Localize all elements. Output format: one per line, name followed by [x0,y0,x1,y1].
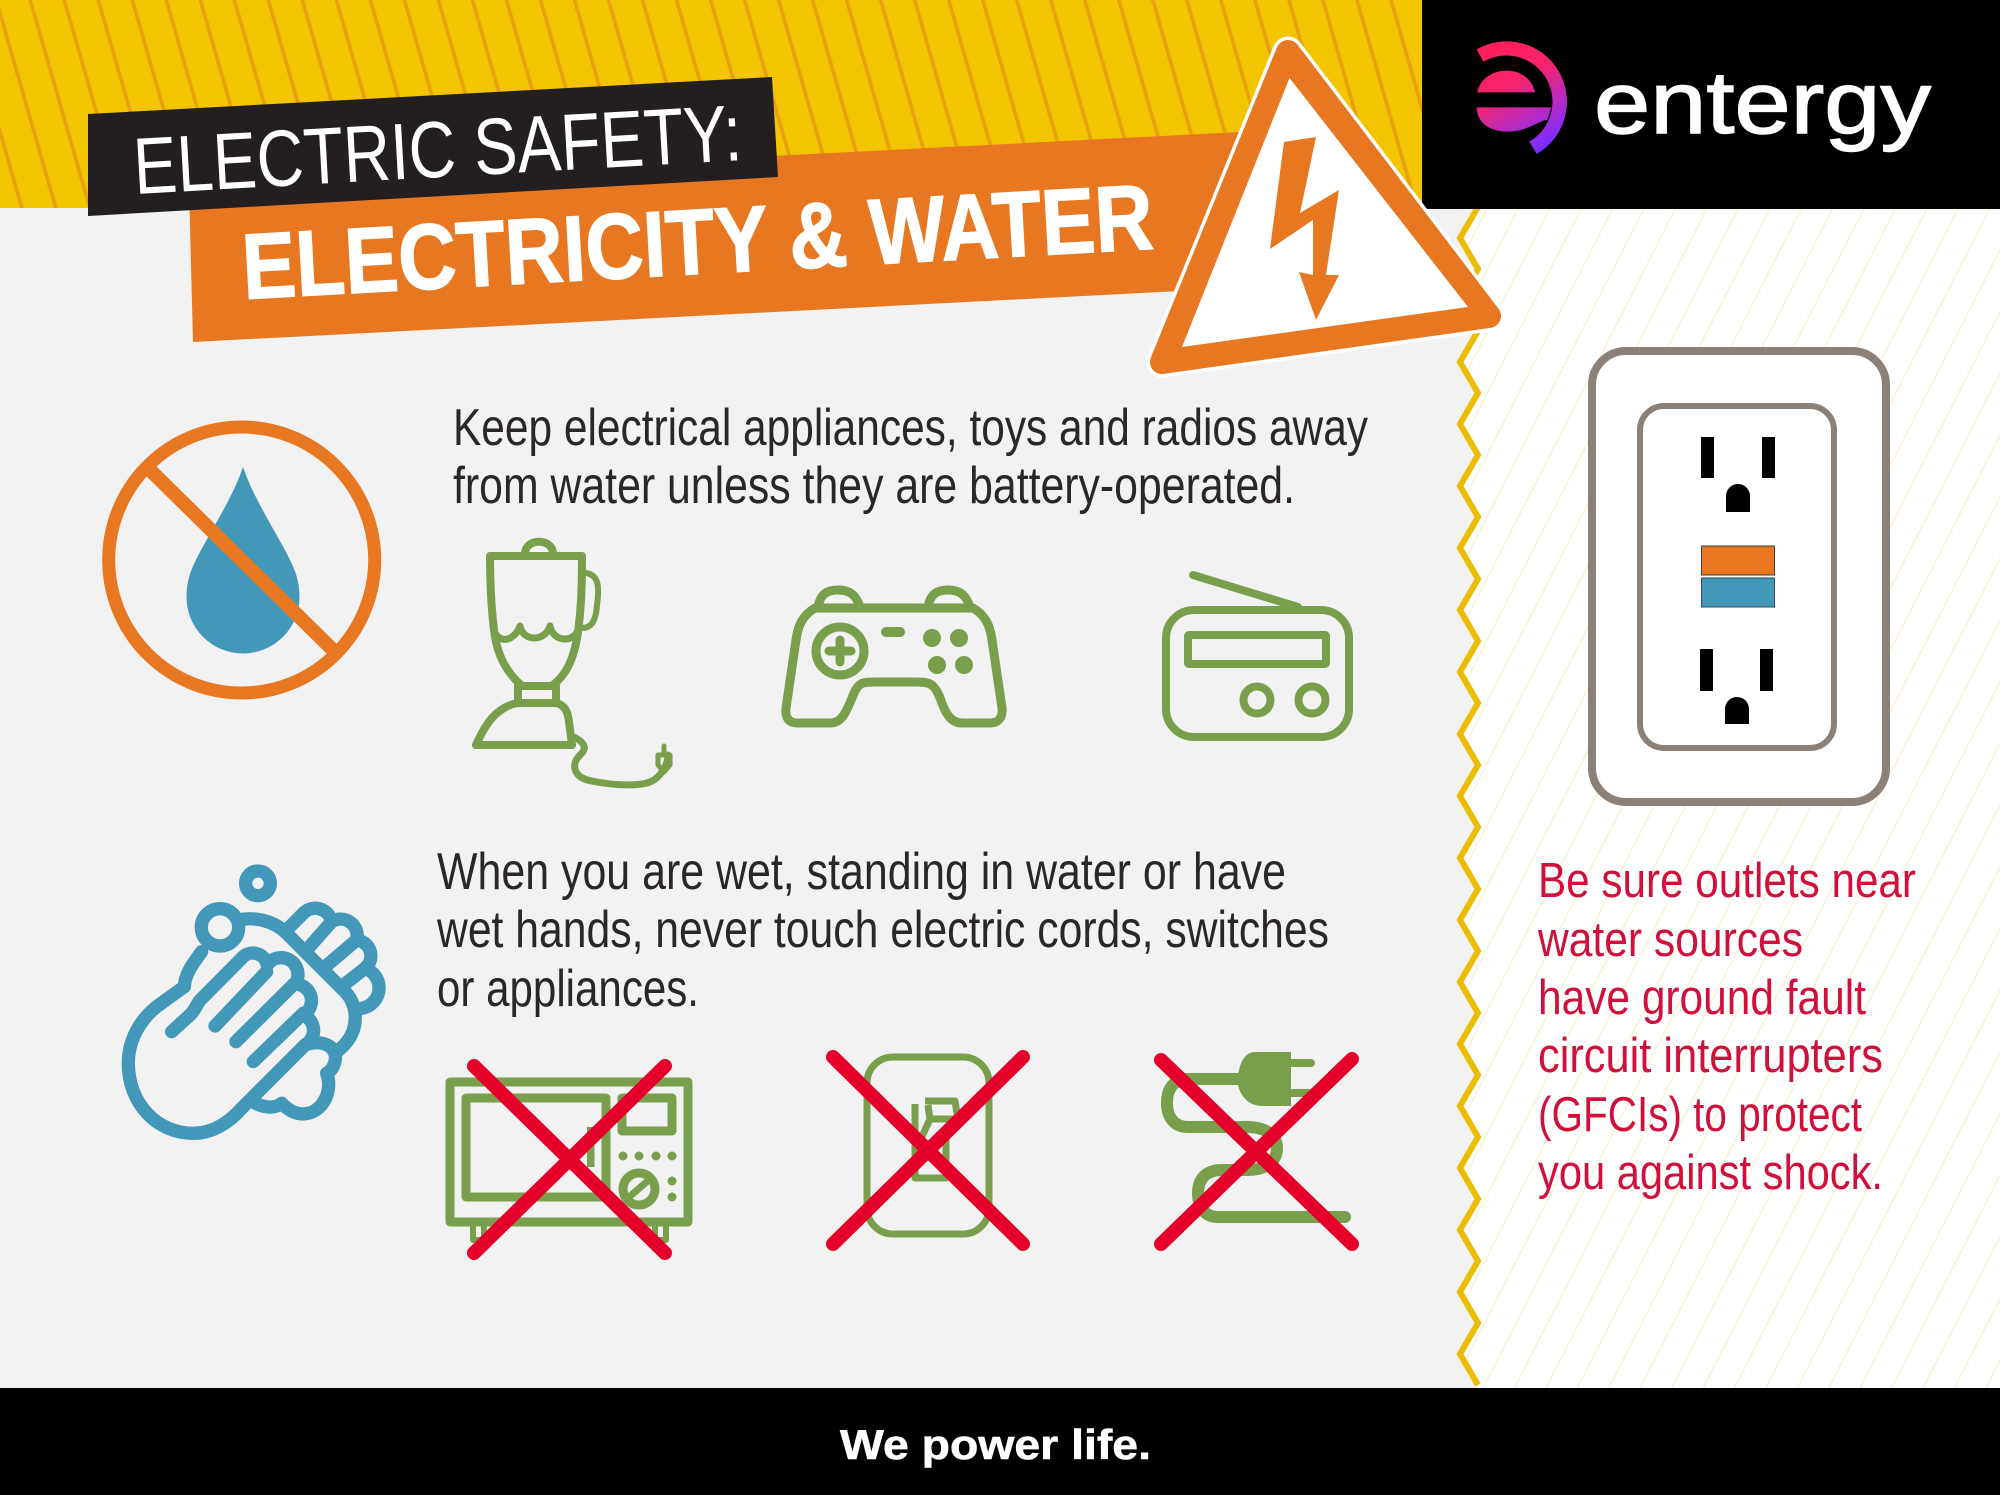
red cross: microwave [474,1066,665,1253]
red cross: switch [833,1057,1023,1244]
icon: radio [1166,575,1349,737]
icon: lightning bolt [1270,137,1339,320]
text: when you are wet [436,843,1329,1018]
red cross: cord [1161,1059,1352,1244]
icon: no water [109,427,375,693]
text: GFCI advice: water sources [1537,913,1803,967]
icon: light switch crossed out [833,1057,1023,1244]
text: keep appliances away: from water unless they are battery-operated. [453,457,1295,515]
text: when you are wet: When you are wet, standing in water or have [437,843,1286,901]
panel: main grey background [0,200,1478,1395]
logo wordmark: entergy [1594,53,1931,152]
text: when you are wet: wet hands, never touch electric cords, switches [436,901,1329,959]
title text: electricity and water: ELECTRICITY & WATER [239,165,1156,319]
text: GFCI advice: (GFCIs) to protect [1538,1088,1862,1142]
text: keep appliances away [453,399,1368,515]
icon: wet hands [128,871,379,1133]
icon: microwave crossed out [450,1066,688,1253]
title banner: orange [189,132,1240,342]
text: GFCI advice: you against shock. [1538,1146,1883,1200]
logo mark [1477,41,1567,154]
footer tagline: We power life. [840,1421,1151,1468]
footer band [0,1388,2000,1495]
text: keep appliances away: Keep electrical appliances, toys and radios away [453,399,1368,457]
title banner: black [88,77,778,216]
icon: blender [476,542,670,785]
icon: GFCI outlet [1592,351,1886,802]
text: when you are wet: or appliances. [437,960,699,1018]
panel: right background with stripes [1440,200,2000,1395]
text: GFCI advice [1537,854,1916,1200]
text: GFCI advice: have ground fault [1538,971,1866,1025]
text: GFCI advice: circuit interrupters [1538,1029,1883,1083]
text: GFCI advice: Be sure outlets near [1538,854,1916,908]
icon: game controller [786,590,1002,723]
header band: yellow stripes [0,0,1422,208]
title text: electric safety: ELECTRIC SAFETY: [131,88,744,211]
icon: electric cord crossed out [1161,1052,1352,1244]
logo panel [1422,0,2000,209]
zigzag divider [1460,207,1478,1385]
icon: warning triangle [1162,52,1489,362]
